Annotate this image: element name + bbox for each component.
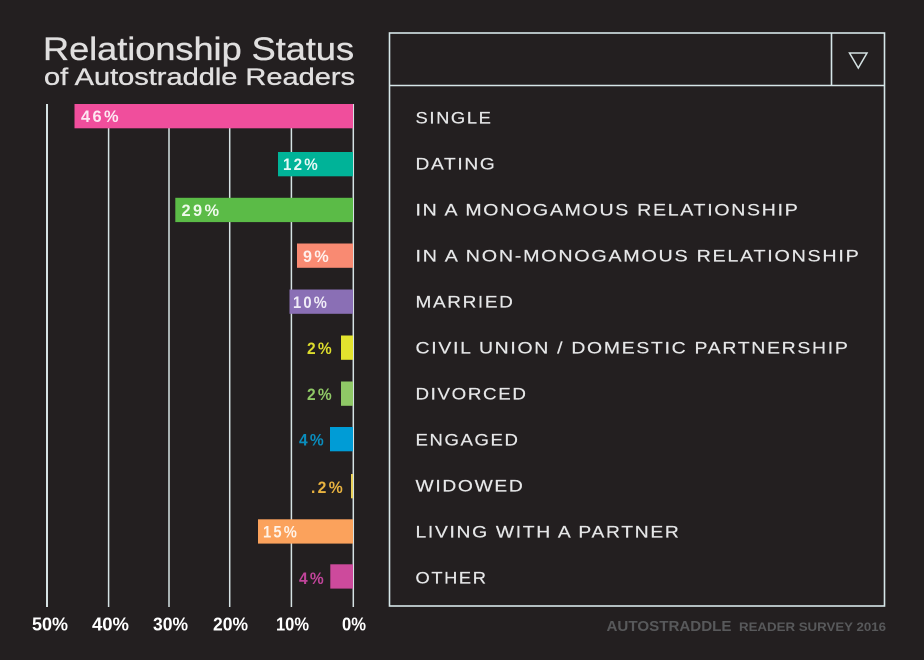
footer credit	[606, 619, 886, 635]
bar: other 4%	[299, 564, 353, 589]
option list: LIVING WITH A PARTNER	[416, 522, 680, 542]
axis labels: 50%	[32, 614, 68, 634]
option list: DATING	[416, 154, 496, 174]
axis labels	[32, 614, 366, 634]
bar: civil union 2%	[307, 336, 353, 360]
bar: non-monogamous 9%	[297, 244, 353, 268]
bar: married 10%	[290, 290, 353, 314]
bar: living with partner 15%: 15%	[263, 522, 299, 542]
axis labels: 0%	[342, 614, 366, 634]
option list: WIDOWED	[416, 476, 524, 496]
bar: non-monogamous 9%: 9%	[303, 247, 331, 266]
option list: SINGLE	[416, 108, 492, 128]
option list: IN A NON-MONOGAMOUS RELATIONSHIP	[416, 246, 860, 266]
bar chart	[32, 104, 366, 634]
bar: civil union 2%: 2%	[307, 339, 334, 358]
dropdown panel	[390, 33, 884, 606]
bar: monogamous 29%	[175, 198, 353, 222]
axis labels: 10%	[276, 614, 309, 634]
bar: single 46%	[74, 104, 353, 128]
option list: DIVORCED	[416, 384, 528, 404]
panel frame	[390, 33, 884, 606]
title: of Autostraddle Readers	[44, 64, 355, 91]
icon: dropdown triangle	[850, 53, 867, 68]
bar: single 46%: 46%	[81, 107, 121, 126]
option list: OTHER	[416, 568, 488, 588]
option list	[416, 108, 860, 588]
option list: MARRIED	[416, 292, 514, 312]
title: Relationship Status	[43, 31, 354, 67]
bar: divorced 2%: 2%	[307, 385, 334, 404]
title	[43, 31, 355, 91]
bar: widowed .2%: .2%	[311, 478, 345, 497]
axis labels: 40%	[92, 614, 129, 634]
axis labels: 20%	[213, 614, 248, 634]
bar: other 4%: 4%	[299, 569, 326, 588]
bar: monogamous 29%: 29%	[182, 201, 222, 220]
option list: CIVIL UNION / DOMESTIC PARTNERSHIP	[416, 338, 850, 358]
option list: IN A MONOGAMOUS RELATIONSHIP	[416, 200, 800, 220]
option list: ENGAGED	[416, 430, 520, 450]
bar: dating 12%	[278, 152, 353, 176]
footer credit: READER SURVEY 2016	[739, 622, 886, 634]
bar: widowed .2%	[311, 474, 353, 498]
bar: dating 12%: 12%	[283, 155, 320, 174]
bar: married 10%: 10%	[293, 293, 329, 312]
bar: engaged 4%: 4%	[299, 430, 326, 450]
axis labels: 30%	[153, 614, 188, 634]
bar: engaged 4%	[299, 427, 353, 451]
footer credit: AUTOSTRADDLE	[606, 619, 732, 635]
bar: living with partner 15%	[258, 519, 353, 544]
gridlines	[47, 104, 353, 607]
bar: divorced 2%	[307, 382, 353, 406]
